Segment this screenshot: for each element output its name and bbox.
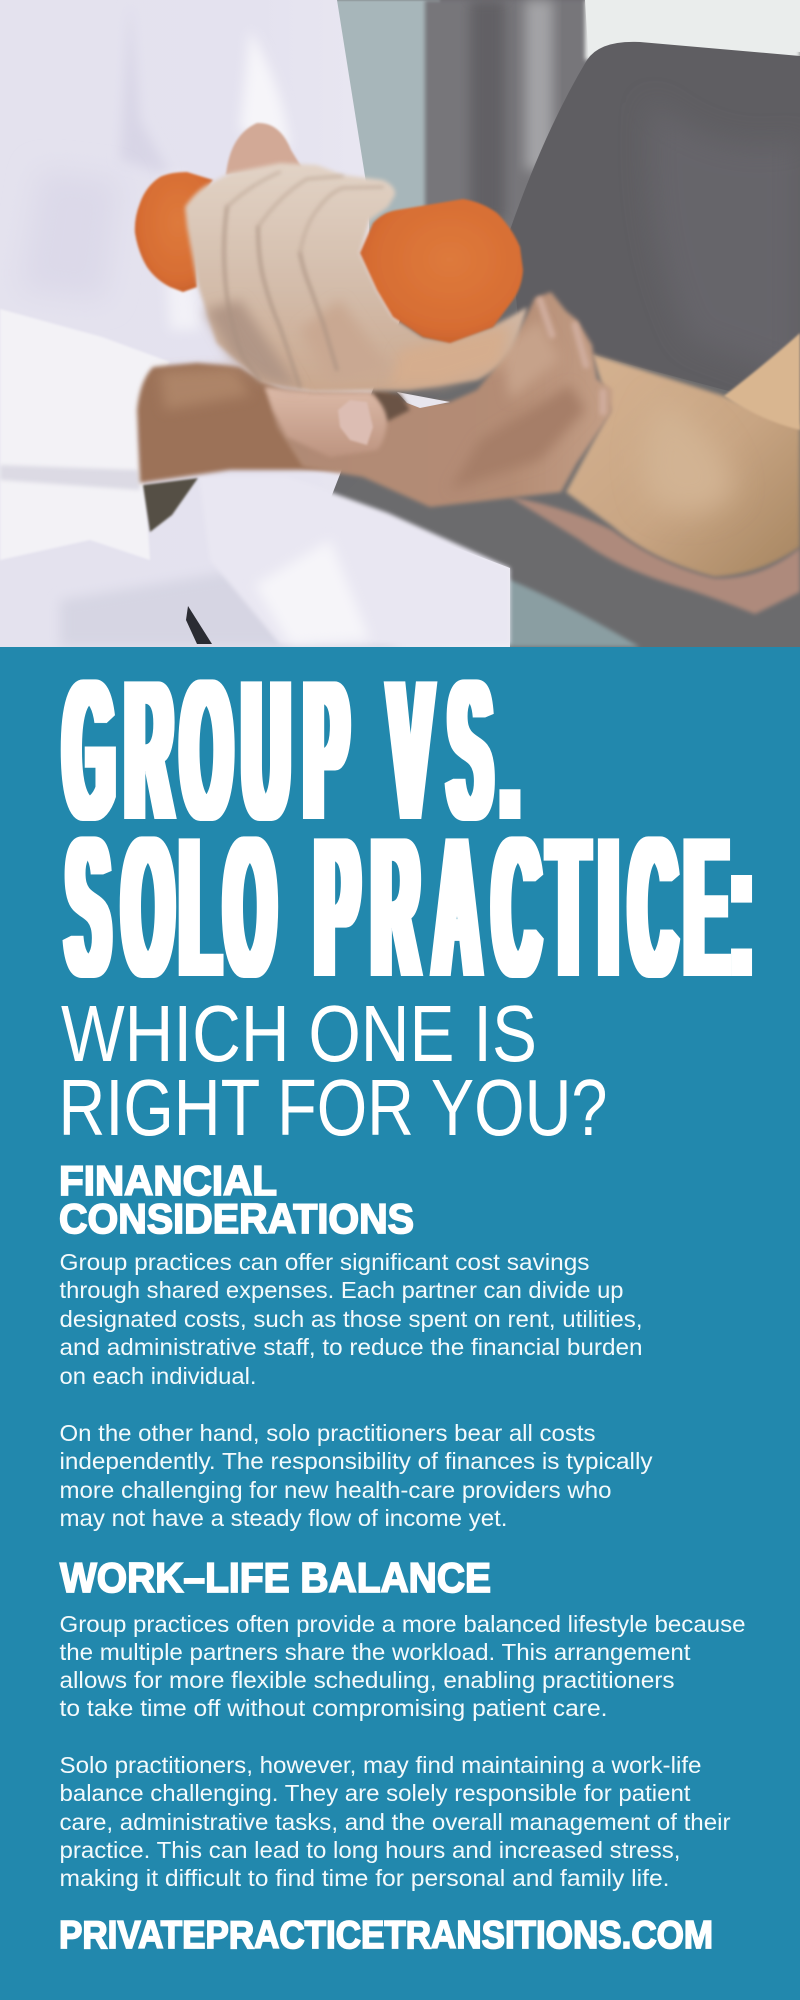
patient's lower hand behind the elbow	[510, 497, 800, 614]
text block: work-life paragraph two	[60, 1752, 731, 1891]
text block: financial paragraph two: may not have a steady flow of income yet.	[60, 1505, 508, 1531]
subtitle: WHICH ONE IS	[61, 989, 537, 1078]
subtitle	[58, 989, 608, 1152]
subtitle: RIGHT FOR YOU?	[58, 1063, 608, 1152]
text block: work-life paragraph one	[60, 1611, 746, 1721]
coat sleeve	[0, 309, 170, 560]
text block: financial paragraph two	[60, 1420, 653, 1531]
text block: work-life paragraph two: balance challenging. They are solely responsible for patient	[60, 1780, 691, 1806]
doctor's supporting hand	[265, 292, 612, 507]
text block: financial paragraph one: and administrative staff, to reduce the financial burden	[60, 1334, 642, 1360]
text block: work-life paragraph two: care, administrative tasks, and the overall management of their	[60, 1809, 731, 1835]
heading: financial considerations: FINANCIAL	[59, 1158, 277, 1204]
heading: work-life balance: WORK–LIFE BALANCE	[60, 1555, 491, 1601]
text block: work-life paragraph one: Group practices often provide a more balanced lifestyle because	[60, 1611, 746, 1637]
doctor's thumb	[265, 387, 387, 457]
text block: financial paragraph one: designated costs, such as those spent on rent, utilities,	[60, 1306, 642, 1332]
text block: work-life paragraph two: practice. This can lead to long hours and increased stress,	[60, 1837, 680, 1863]
footer website: PRIVATEPRACTICETRANSITIONS.COM	[59, 1914, 713, 1957]
photo: doctor supporting a patient's arm holding an orange dumbbell	[0, 0, 800, 647]
text block: work-life paragraph one: to take time off without compromising patient care.	[60, 1695, 608, 1721]
text block: financial paragraph one: through shared expenses. Each partner can divide up	[60, 1277, 624, 1303]
title	[64, 640, 752, 1019]
heading: financial considerations	[59, 1158, 414, 1242]
patient's thumb	[226, 123, 302, 175]
title: SOLO PRACTICE:	[67, 797, 752, 1019]
thumbnail	[338, 400, 373, 445]
text block: financial paragraph two: independently. The responsibility of finances is typically	[60, 1448, 653, 1474]
doctor's white coat	[0, 0, 510, 647]
text block: work-life paragraph two: Solo practitioners, however, may find maintaining a work-life	[60, 1752, 701, 1778]
title: GROUP VS.	[64, 640, 519, 862]
text block: financial paragraph one	[60, 1249, 642, 1389]
doctor's forearm	[137, 363, 340, 483]
sliver of white coat between the hands	[397, 392, 450, 408]
small ball of orange dumbbell	[135, 172, 213, 292]
text block: work-life paragraph two: making it difficult to find time for personal and family life.	[60, 1865, 670, 1891]
text block: financial paragraph two: more challenging for new health-care providers who	[60, 1477, 611, 1503]
wristwatch strap	[143, 478, 198, 532]
text block: financial paragraph one: Group practices can offer significant cost savings	[60, 1249, 590, 1275]
text block: financial paragraph two: On the other hand, solo practitioners bear all costs	[60, 1420, 596, 1446]
heading: financial considerations: CONSIDERATIONS	[59, 1196, 414, 1242]
patient's hand gripping dumbbell	[185, 163, 527, 392]
blue content panel	[0, 647, 800, 2000]
text block: work-life paragraph one: the multiple partners share the workload. This arrangement	[60, 1639, 691, 1665]
large ball of orange dumbbell	[360, 199, 523, 343]
dark belt under coat	[186, 606, 212, 644]
patient's forearm	[566, 354, 800, 577]
finger creases	[224, 207, 337, 387]
text block: financial paragraph one: on each individual.	[60, 1363, 256, 1389]
text block: work-life paragraph one: allows for more flexible scheduling, enabling practitioners	[60, 1667, 674, 1693]
